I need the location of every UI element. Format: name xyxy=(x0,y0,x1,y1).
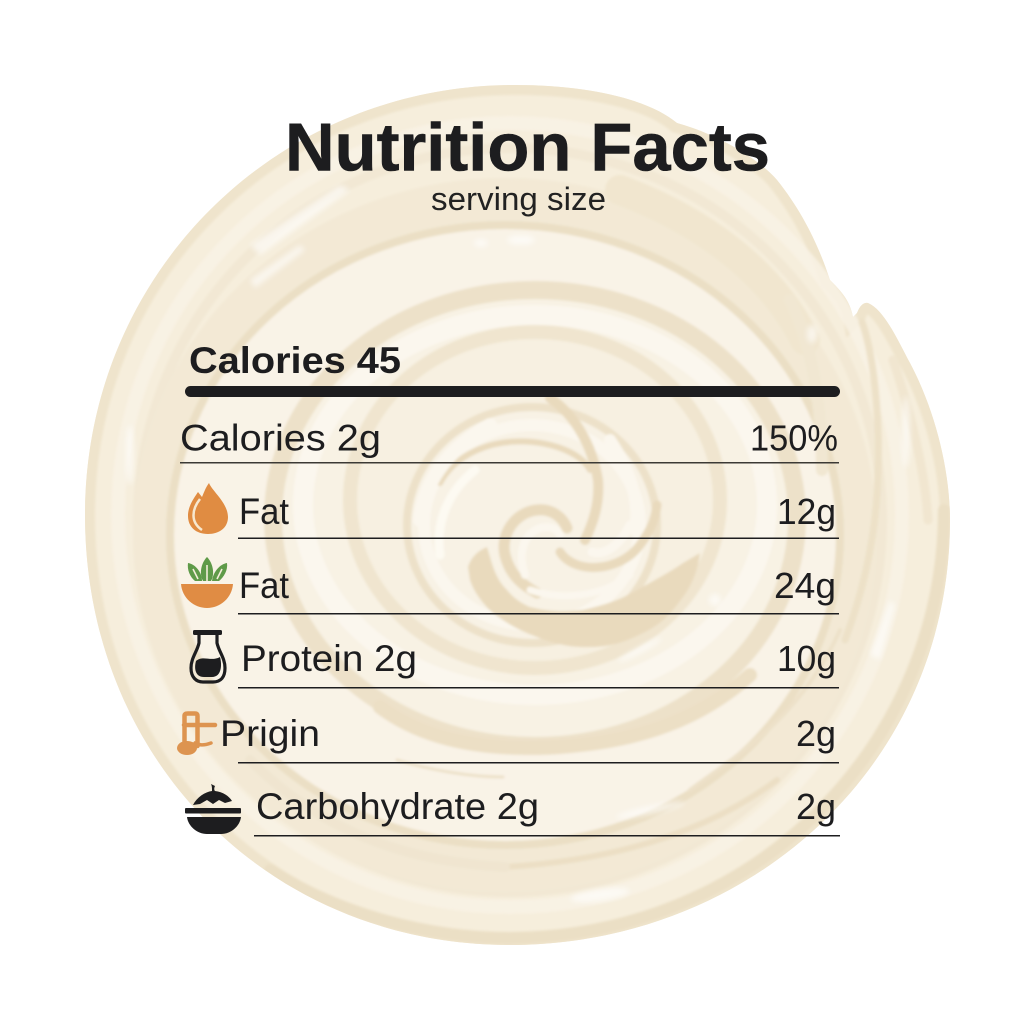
row: calories 2g: Calories 2g xyxy=(180,418,381,458)
icon: orange oil drop xyxy=(188,483,228,534)
icon: orange tool glyph xyxy=(177,714,215,755)
row: fat 24g: 24g xyxy=(774,565,836,606)
row: fat 24g xyxy=(181,557,839,614)
panel: swirled cream background xyxy=(80,80,960,950)
centre rings xyxy=(440,441,590,483)
subtitle: serving size: serving size xyxy=(431,181,606,217)
row: fat 12g: 12g xyxy=(777,491,836,532)
row: carbohydrate: Carbohydrate 2g xyxy=(256,786,539,827)
thick divider bar xyxy=(185,386,840,397)
row: calories 2g xyxy=(180,418,839,464)
tail strokes xyxy=(845,322,878,640)
icon: black covered bowl xyxy=(185,784,241,834)
icon: dark bottle xyxy=(191,630,225,682)
row: prigin xyxy=(177,713,839,764)
row: fat 12g: Fat xyxy=(239,491,290,532)
centre hook xyxy=(504,510,567,593)
row: prigin: Prigin xyxy=(220,713,320,754)
row: protein: Protein 2g xyxy=(241,638,417,679)
row: prigin: 2g xyxy=(796,713,836,754)
wide soft band xyxy=(155,200,855,870)
row: carbohydrate xyxy=(185,784,840,836)
dark crescent xyxy=(468,547,700,647)
row: calories 2g: 150% xyxy=(750,418,838,458)
title: Nutrition Facts xyxy=(285,110,770,186)
outer rim xyxy=(85,85,950,945)
band 3 xyxy=(350,332,720,668)
band 4 ring xyxy=(407,407,657,643)
icon: bowl with leaves xyxy=(181,557,233,608)
lower dark streaks xyxy=(380,675,750,748)
heading: calories: Calories 45 xyxy=(189,340,401,381)
glossy highlights xyxy=(126,185,910,905)
row: carbohydrate: 2g xyxy=(796,786,836,827)
band 2 xyxy=(273,290,797,746)
row: protein xyxy=(191,630,839,688)
row: fat 24g: Fat xyxy=(239,565,290,606)
row: protein: 10g xyxy=(777,638,836,679)
row: fat 12g xyxy=(188,483,839,539)
band 1 and interior xyxy=(170,225,840,845)
